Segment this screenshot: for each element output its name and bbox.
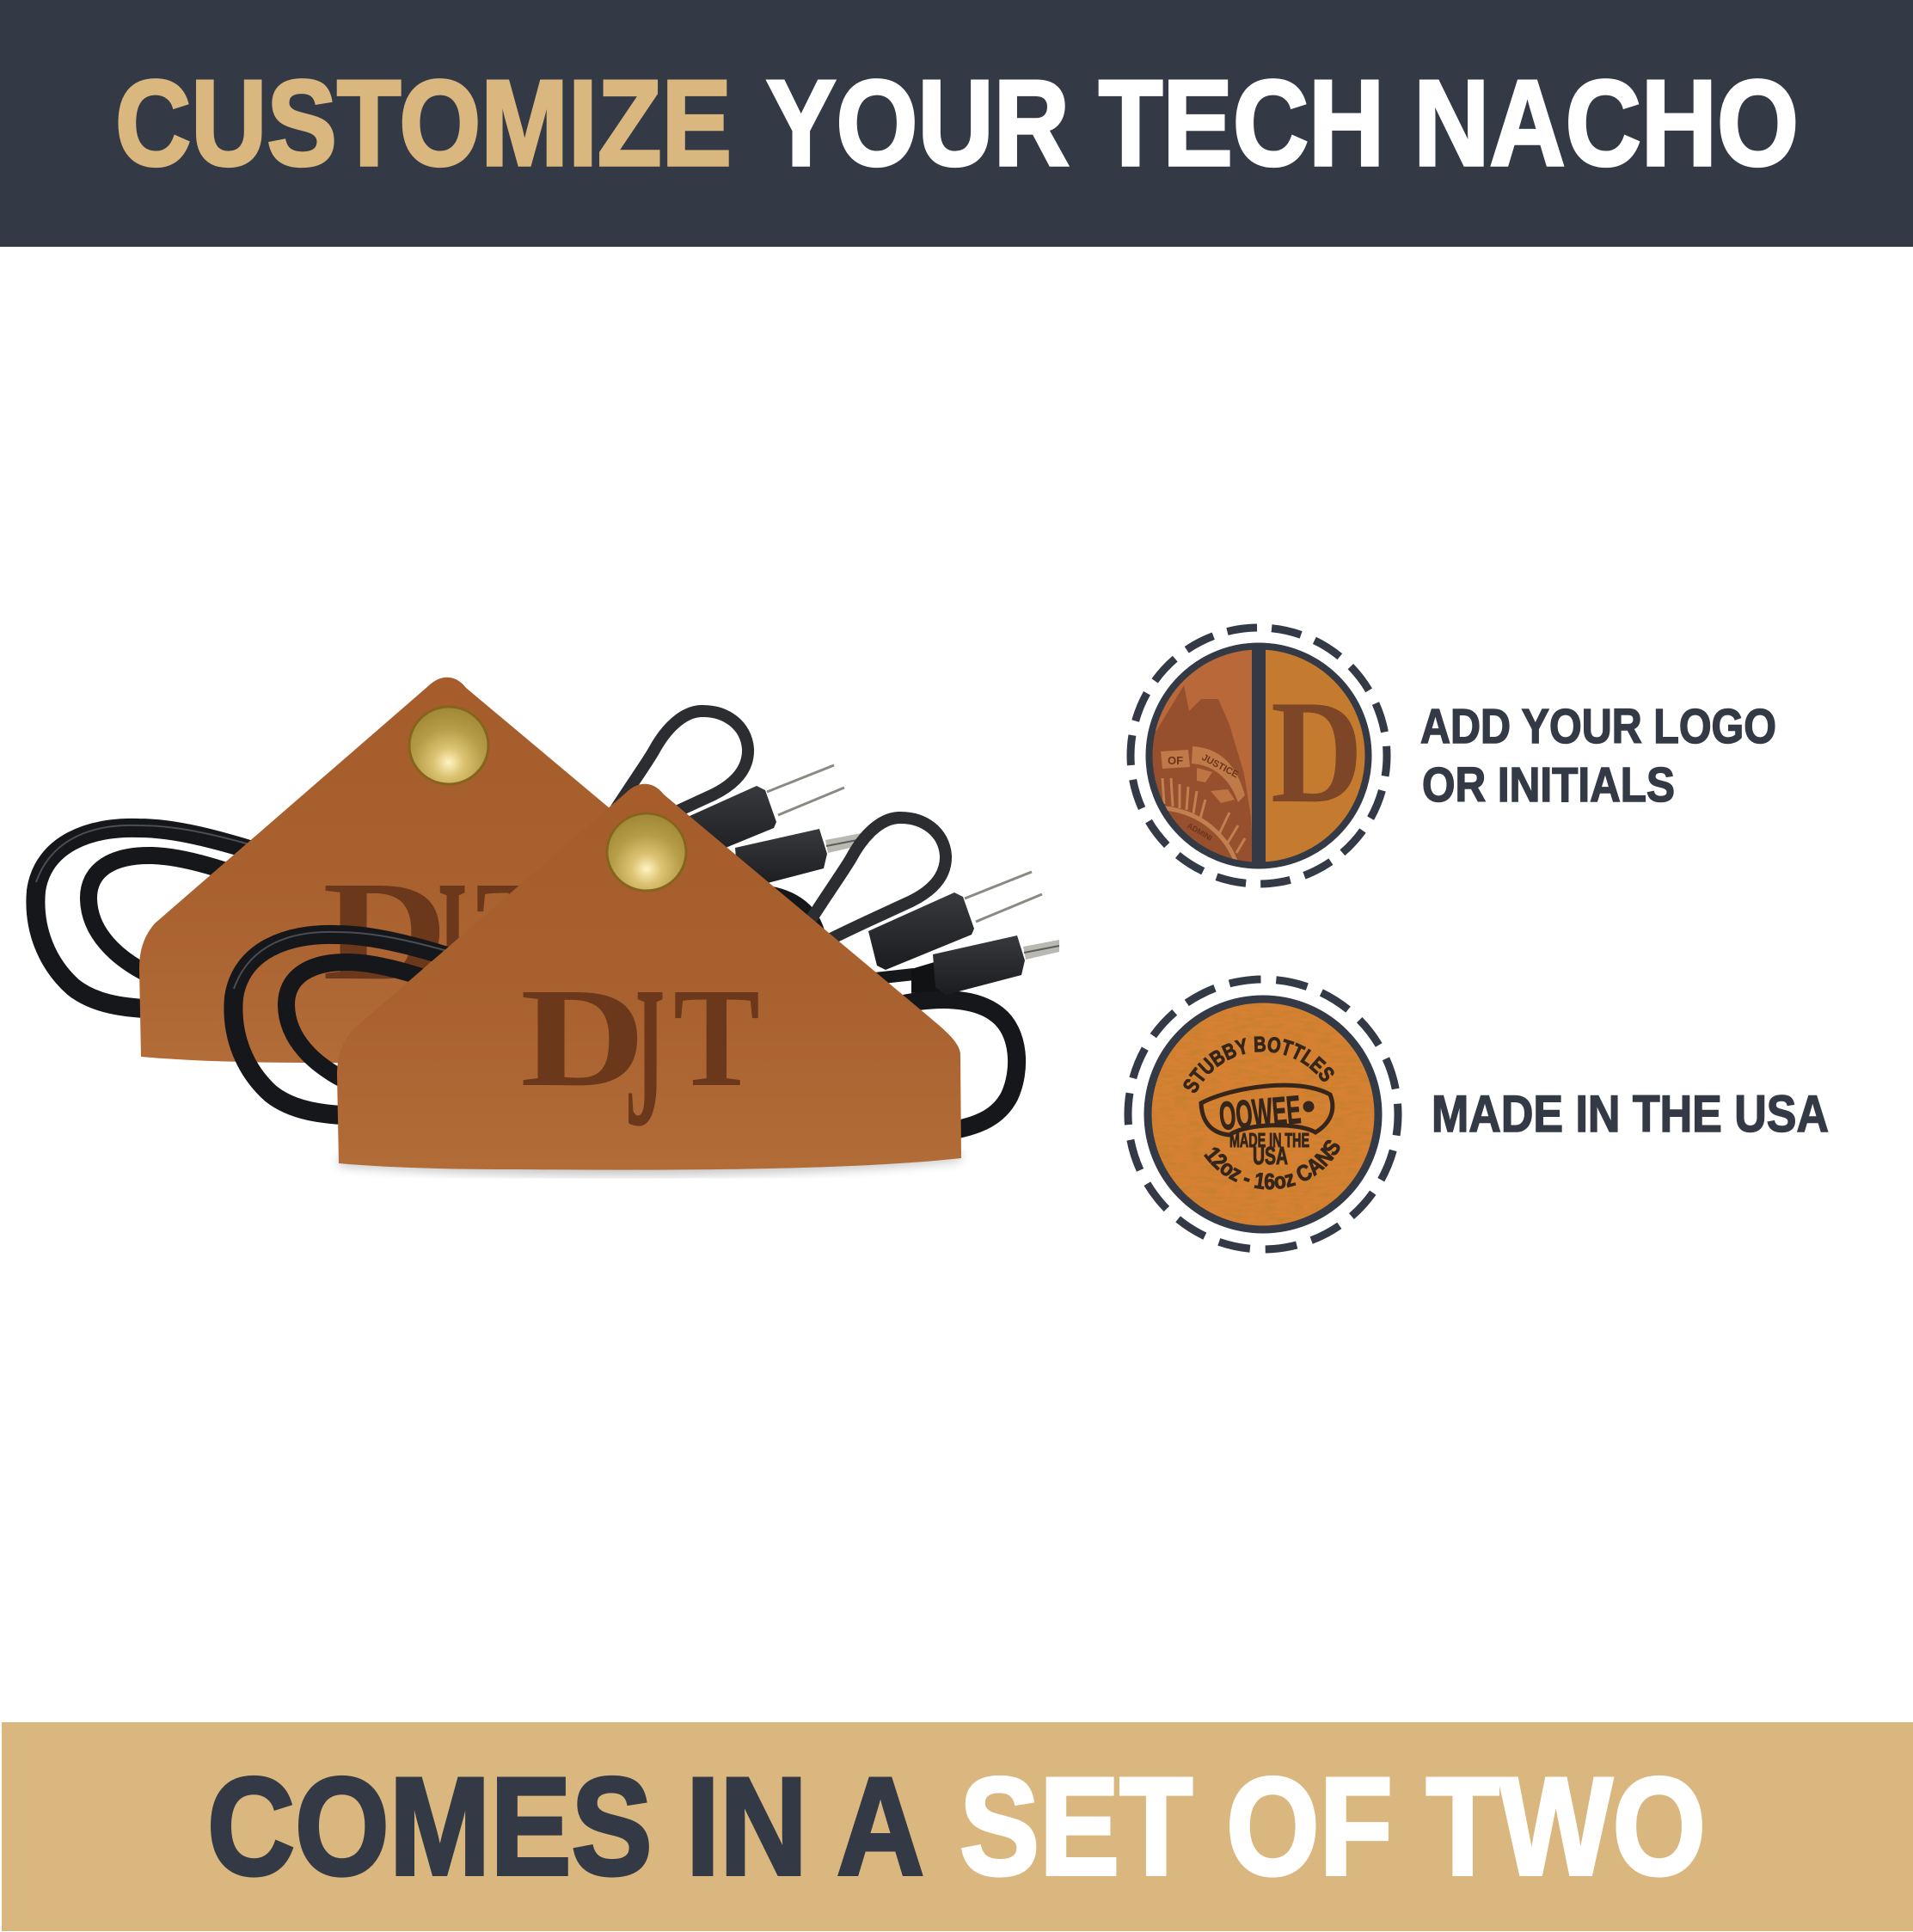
- lower right cable loop: [894, 1000, 1017, 1132]
- footer banner: [2, 1722, 1913, 1931]
- brass snap: [607, 813, 686, 891]
- label: made in the usa: MADE IN THE USA: [1432, 1085, 1829, 1143]
- engraved initials: J: [625, 944, 665, 1168]
- stamp text: OOWEE: [1217, 1087, 1303, 1138]
- upper right cable loop: [800, 818, 946, 946]
- front leather organizer with cable: [233, 784, 1059, 1175]
- label: add your logo or initials: ADD YOUR LOGO: [1420, 699, 1776, 754]
- left half: embossed logo: JUSTICE: [1200, 752, 1240, 780]
- left half: embossed logo: D: [1271, 671, 1363, 834]
- engraved initials: D: [520, 959, 646, 1116]
- upper connector with two pins: [868, 872, 1042, 970]
- label: add your logo or initials: [1420, 699, 1776, 813]
- label: add your logo or initials: OR INITIALS: [1422, 757, 1675, 813]
- badge: logo or initials sample: [1121, 618, 1396, 893]
- rear leather organizer with cable: T: [475, 852, 562, 1009]
- stamp text: STUBBY BOTTLES: [1183, 1036, 1334, 1093]
- engraved initials: [520, 944, 760, 1168]
- footer text: comes in a set of two: SET OF TWO: [960, 1749, 1706, 1904]
- right half: engraved letter: [1266, 650, 1365, 862]
- left half: embossed logo: [1152, 650, 1365, 862]
- lower connector with metal tip: [933, 935, 1059, 995]
- title: customize your tech nacho: CUSTOMIZE: [115, 55, 732, 192]
- rear leather organizer with cable: [35, 678, 861, 1064]
- stamp text: [1183, 1036, 1340, 1190]
- stamp text: MADE IN THE: [1229, 1129, 1309, 1151]
- left half: embossed logo: ADMINI: [1186, 821, 1214, 843]
- left cable loop: [233, 935, 481, 1116]
- badge: made in the usa stamp: [1125, 975, 1401, 1254]
- footer text: comes in a set of two: COMES IN A: [207, 1749, 924, 1904]
- stamp text: 12oz - 16oz CANS: [1204, 1140, 1340, 1190]
- leather body: [337, 784, 961, 1170]
- rear leather organizer with cable: J: [427, 837, 467, 1061]
- product photo: two leather cable organizers: [35, 678, 1059, 1175]
- rear leather organizer with cable: D: [322, 852, 448, 1009]
- logo words: OF: [1168, 754, 1183, 767]
- engraved initials: T: [673, 959, 760, 1116]
- header banner: [0, 0, 1913, 247]
- stamp text: USA: [1253, 1143, 1288, 1170]
